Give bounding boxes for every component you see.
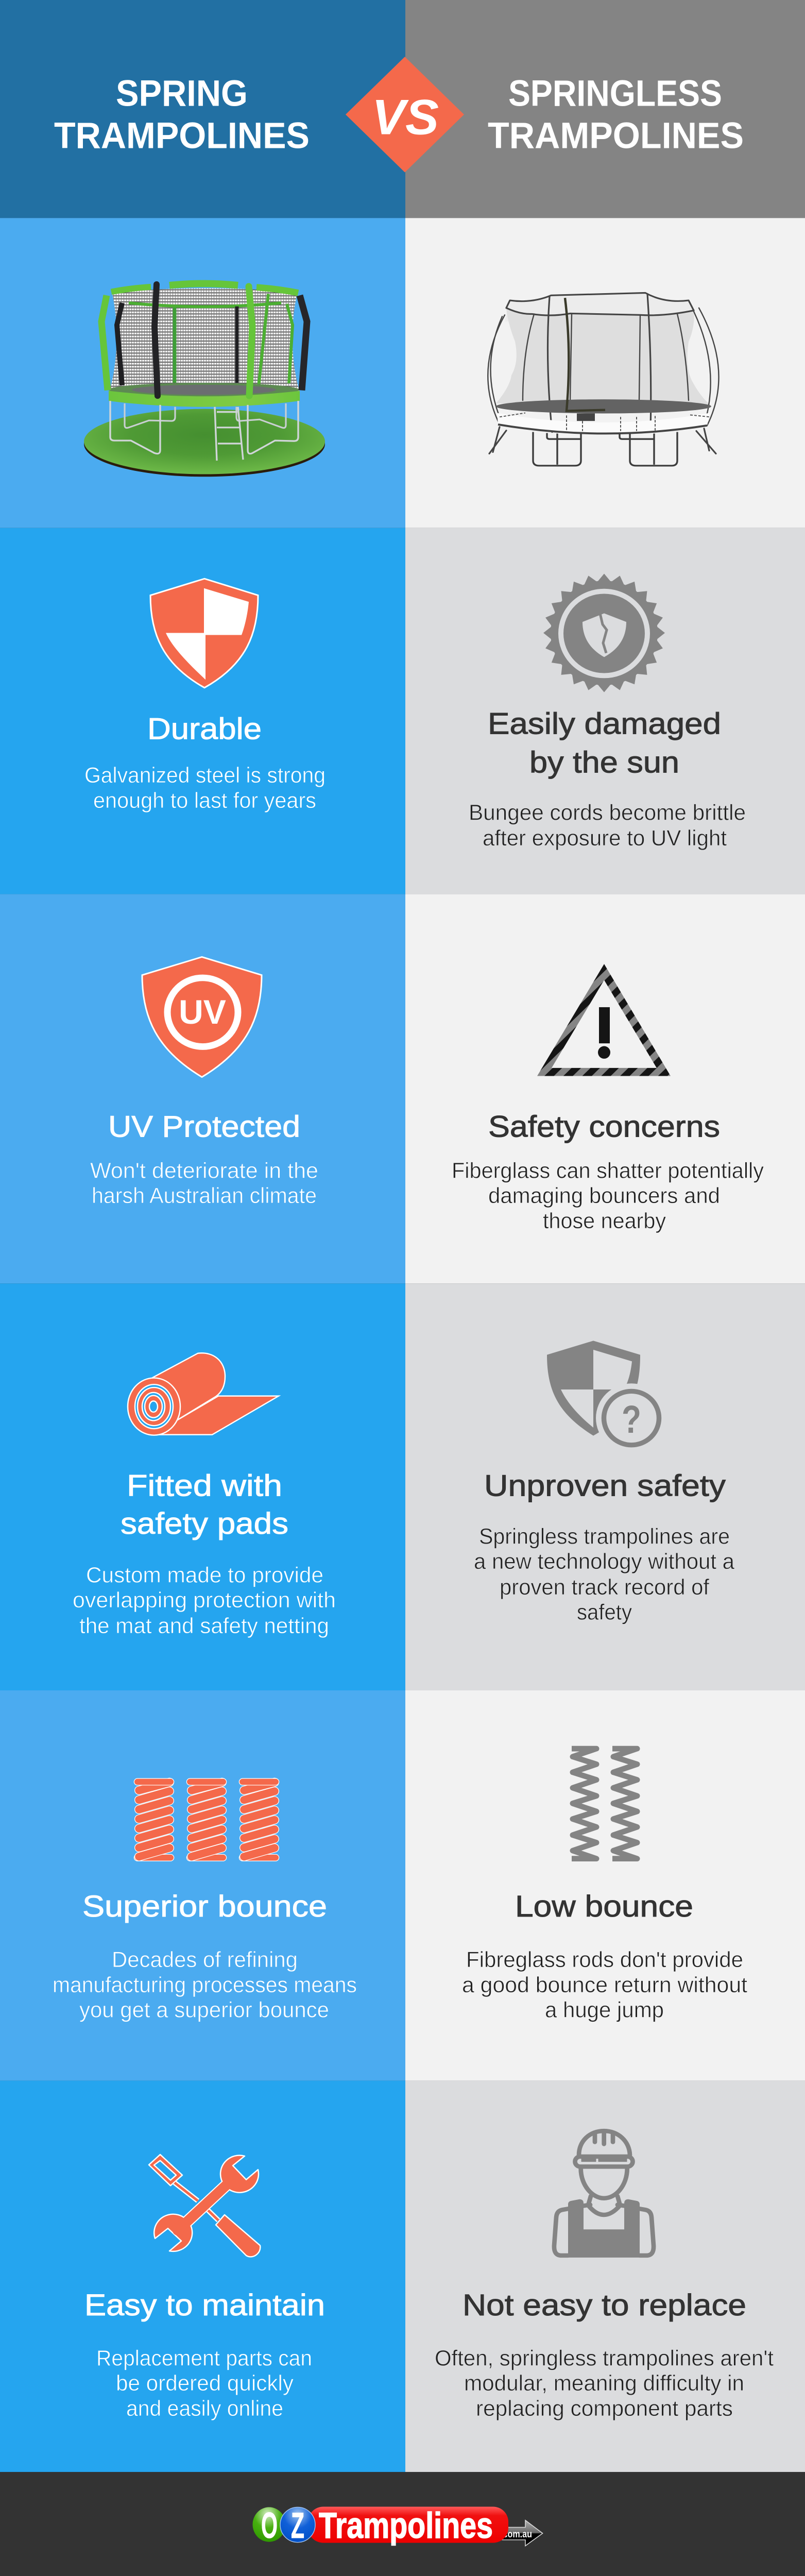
text: damaged description: after exposure to UV light [483, 826, 727, 851]
panel: superior bounce [0, 1690, 405, 2081]
title: spring trampolines [54, 74, 310, 156]
heading: durable: Durable [147, 711, 262, 745]
text: damaged description [469, 801, 746, 851]
logo letter z [280, 2506, 315, 2546]
heading: easy to maintain: Easy to maintain [84, 2288, 325, 2322]
title: spring trampolines: SPRING [116, 74, 248, 114]
title: springless trampolines: SPRINGLESS [508, 74, 722, 114]
text: unproven description: a new technology without a [474, 1550, 735, 1574]
vs diamond badge: VS [372, 89, 439, 145]
icon: worker with helmet [554, 2131, 654, 2258]
icon: two zigzag rods [572, 1749, 637, 1859]
text: low bounce description: a huge jump [545, 1998, 664, 2023]
icon: checkered shield [150, 579, 258, 688]
panel: header springless [405, 0, 805, 218]
text: safety description: Fiberglass can shatter potentially [452, 1159, 764, 1183]
heading: easily damaged by the sun [488, 706, 721, 779]
logo arrow [498, 2520, 543, 2546]
icon: three orange springs [138, 1782, 276, 1858]
text: replace description [435, 2346, 774, 2421]
text: safety description: damaging bouncers and [488, 1184, 720, 1208]
heading: fitted with safety pads [121, 1468, 288, 1540]
text: durable description: Galvanized steel is strong [84, 764, 326, 788]
illustration: green spring trampoline on grass [84, 283, 325, 477]
text: safety description: those nearby [543, 1209, 666, 1233]
logo arrow: .com.au [501, 2529, 532, 2540]
panel: header spring [0, 0, 405, 218]
panel: safety pads [0, 1283, 405, 1690]
illustration: springless trampoline [488, 293, 719, 466]
icon: warning triangle [537, 964, 671, 1076]
text: bounce description: manufacturing processes means [53, 1973, 357, 1997]
text: unproven description: Springless trampolines are [479, 1524, 730, 1549]
vs diamond badge [346, 57, 464, 172]
panel: easily damaged [405, 528, 805, 894]
heading: uv protected: UV Protected [108, 1109, 300, 1143]
text: bounce description: Decades of refining [112, 1948, 298, 1972]
title: spring trampolines: TRAMPOLINES [54, 115, 310, 156]
text: maintain description: and easily online [126, 2396, 283, 2421]
panel: safety concerns [405, 894, 805, 1283]
text: low bounce description: Fibreglass rods don't provide [466, 1948, 743, 1972]
text: pads description: overlapping protection with [73, 1588, 336, 1613]
text: replace description: modular, meaning difficulty in [464, 2371, 744, 2396]
heading: easily damaged by the sun: Easily damaged [488, 706, 721, 740]
panel: unproven safety [405, 1283, 805, 1690]
heading: low bounce: Low bounce [515, 1889, 693, 1923]
icon: rolled safety pad [128, 1353, 279, 1435]
icon: sun badge with cracked shield [543, 573, 665, 692]
text: uv description: harsh Australian climate [92, 1184, 317, 1208]
text: low bounce description [462, 1948, 747, 2023]
text: maintain description: Replacement parts can [96, 2346, 312, 2370]
text: durable description: enough to last for years [93, 788, 316, 813]
heading: easily damaged by the sun: by the sun [529, 745, 679, 779]
panel: springless trampoline photo [405, 218, 805, 528]
logo letter o: O [261, 2506, 278, 2546]
heading: unproven safety: Unproven safety [484, 1468, 726, 1503]
logo letter z: Z [291, 2506, 304, 2546]
panel: low bounce [405, 1690, 805, 2081]
text: unproven description: safety [577, 1600, 632, 1624]
title: springless trampolines: TRAMPOLINES [488, 115, 744, 156]
heading: superior bounce: Superior bounce [82, 1889, 327, 1923]
logo letter o [252, 2506, 285, 2546]
text: pads description: the mat and safety netting [79, 1614, 329, 1638]
icon: uv shield [142, 957, 262, 1077]
panel: footer [0, 2472, 805, 2576]
logo red pill: Trampolines [319, 2506, 493, 2546]
text: pads description: Custom made to provide [86, 1563, 323, 1587]
text: damaged description: Bungee cords become brittle [469, 801, 746, 825]
icon: shield with question mark: ? [622, 1398, 641, 1442]
text: durable description [84, 764, 326, 813]
heading: fitted with safety pads: Fitted with [127, 1468, 282, 1503]
icon: uv shield: UV [179, 993, 226, 1031]
text: unproven description [474, 1524, 735, 1624]
panel: uv protected [0, 894, 405, 1283]
text: low bounce description: a good bounce return without [462, 1973, 747, 1997]
text: maintain description [96, 2346, 312, 2421]
heading: not easy to replace: Not easy to replace [463, 2288, 746, 2322]
panel: easy to maintain [0, 2081, 405, 2472]
panel: durable [0, 528, 405, 894]
icon: crossed wrench and screwdriver [149, 2155, 260, 2257]
text: replace description: replacing component parts [476, 2396, 733, 2421]
text: replace description: Often, springless trampolines aren't [435, 2346, 774, 2370]
text: safety description [452, 1159, 764, 1233]
panel: not easy to replace [405, 2081, 805, 2472]
icon: shield with question mark [547, 1341, 667, 1453]
logo: oz trampolines [252, 2506, 543, 2546]
text: unproven description: proven track record of [500, 1575, 710, 1600]
text: maintain description: be ordered quickly [116, 2371, 294, 2396]
panel: spring trampoline photo [0, 218, 405, 528]
text: pads description [73, 1563, 336, 1638]
text: uv description [90, 1159, 318, 1208]
heading: safety concerns: Safety concerns [488, 1109, 720, 1143]
text: bounce description: you get a superior bounce [79, 1998, 329, 2023]
heading: fitted with safety pads: safety pads [121, 1506, 288, 1540]
text: bounce description [53, 1948, 357, 2023]
title: springless trampolines [488, 74, 744, 156]
text: uv description: Won't deteriorate in the [90, 1159, 318, 1183]
